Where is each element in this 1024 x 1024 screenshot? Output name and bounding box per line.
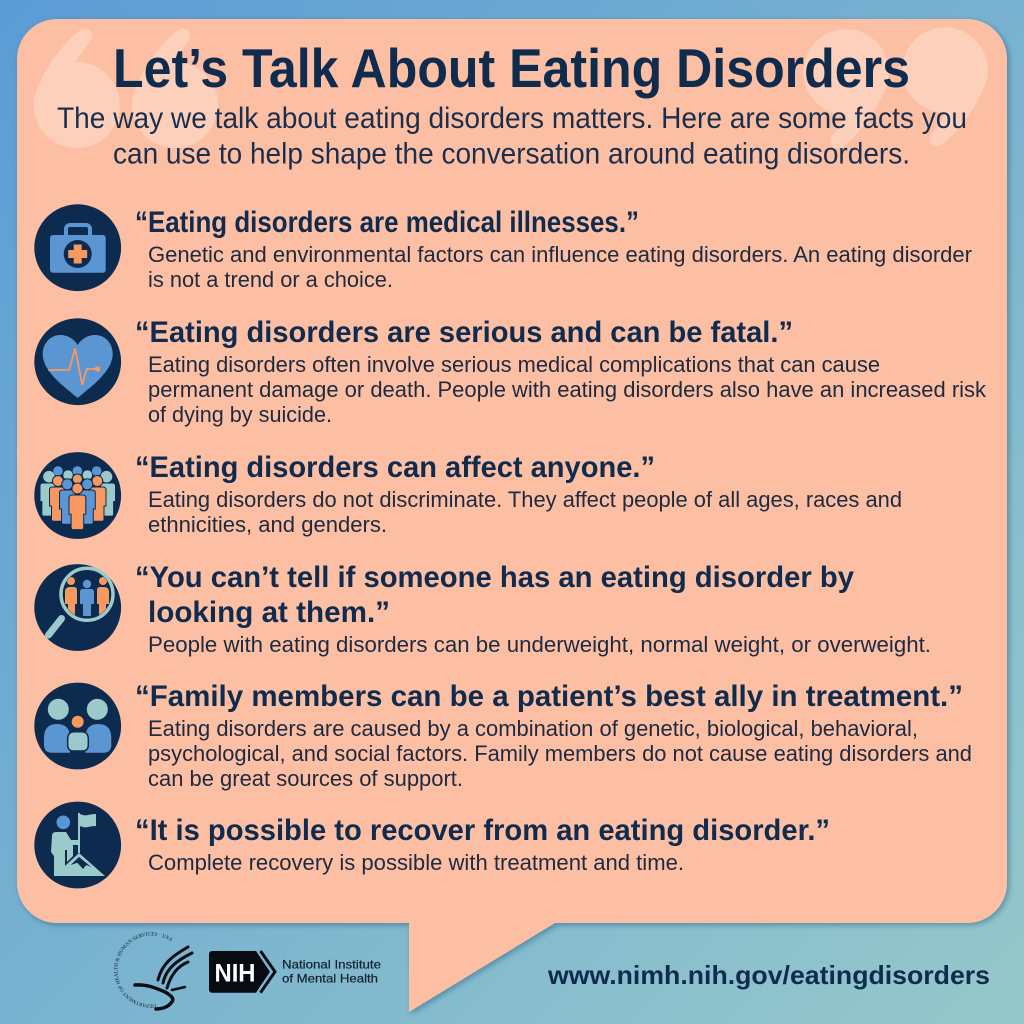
- decorative opening quotation mark: [34, 29, 218, 148]
- intro text: can use to help shape the conversation around eating disorders.: [113, 138, 910, 170]
- body text: Eating disorders are caused by a combination of genetic, biological, behavioral,: [148, 716, 918, 741]
- body text: People with eating disorders can be underweight, normal weight, or overweight.: [148, 632, 931, 657]
- intro text: The way we talk about eating disorders matters. Here are some facts you: [57, 102, 967, 135]
- logo: NIH: NIH: [214, 960, 256, 988]
- body text: can be great sources of support.: [148, 766, 463, 791]
- icon: crowd of people: [34, 452, 121, 539]
- body text: psychological, and social factors. Family members do not cause eating disorders and: [148, 741, 972, 766]
- logo: NIH: [209, 951, 275, 993]
- body text: Complete recovery is possible with treatment and time.: [148, 850, 684, 875]
- title: Let’s Talk About Eating Disorders: [113, 37, 910, 99]
- intro text: [57, 102, 967, 170]
- icon: magnifying glass over people: [34, 564, 121, 651]
- body text: [148, 716, 972, 791]
- National Institute of Mental Health: [282, 958, 381, 986]
- body text: Eating disorders often involve serious medical complications that can cause: [148, 352, 880, 377]
- decorative closing quotation mark: [803, 27, 988, 148]
- heading: “You can’t tell if someone has an eating disorder by: [135, 561, 855, 594]
- fact 1: medical illnesses: [34, 204, 972, 292]
- fact 4: you can't tell by looking: [34, 561, 931, 657]
- icon: climber with flag on mountain: [34, 802, 121, 888]
- fact 5: family members: [34, 680, 972, 791]
- body text: [148, 242, 972, 292]
- fact 2: serious and fatal: [34, 316, 987, 427]
- heading: looking at them.”: [148, 596, 390, 629]
- National Institute of Mental Health: of Mental Health: [282, 972, 378, 986]
- icon: heart with pulse: [34, 318, 121, 405]
- body text: Genetic and environmental factors can influence eating disorders. An eating disorder: [148, 242, 972, 267]
- body text: ethnicities, and genders.: [148, 512, 387, 537]
- body text: [148, 487, 902, 537]
- heading: “Family members can be a patient’s best ally in treatment.”: [135, 680, 963, 713]
- heading: [135, 561, 855, 629]
- body text: permanent damage or death. People with eating disorders also have an increased risk: [148, 377, 987, 402]
- heading: “Eating disorders are serious and can be fatal.”: [135, 316, 793, 349]
- fact 6: recovery is possible: [34, 802, 830, 888]
- logo: HHS seal: DEPARTMENT OF HEALTH & HUMAN SERVICES · USA: [114, 932, 172, 1008]
- heading: “Eating disorders can affect anyone.”: [135, 451, 655, 484]
- heading: “It is possible to recover from an eating disorder.”: [135, 814, 830, 847]
- National Institute of Mental Health: National Institute: [282, 958, 381, 972]
- body text: [148, 352, 987, 427]
- website URL: www.nimh.nih.gov/eatingdisorders: [547, 960, 990, 990]
- fact 3: can affect anyone: [34, 451, 902, 539]
- heading: “Eating disorders are medical illnesses.”: [135, 206, 639, 239]
- body text: Eating disorders do not discriminate. They affect people of all ages, races and: [148, 487, 902, 512]
- icon: first aid kit: [34, 204, 121, 291]
- body text: is not a trend or a choice.: [148, 267, 393, 292]
- icon: family: [34, 683, 121, 769]
- body text: of dying by suicide.: [148, 402, 332, 427]
